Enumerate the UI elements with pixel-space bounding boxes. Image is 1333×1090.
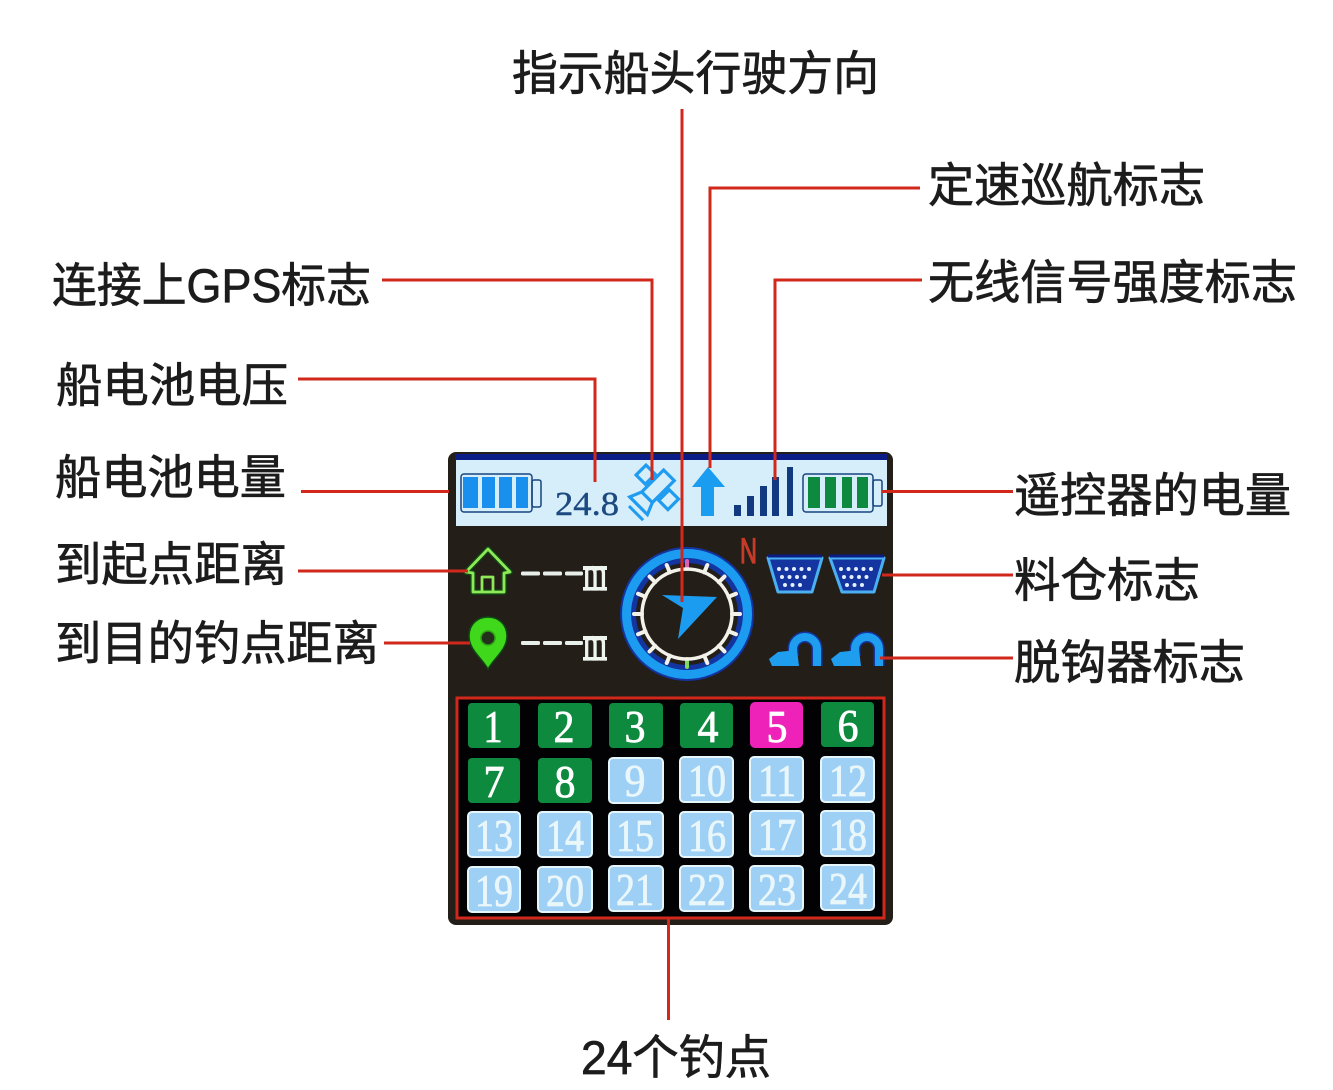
- compass: [626, 554, 748, 674]
- icon: cruise control arrow: [692, 467, 725, 516]
- leader: cruise control: [710, 188, 920, 468]
- spot 2: [538, 701, 592, 752]
- spot 22: 22: [688, 864, 726, 915]
- leader: 24 fishing spots: [667, 918, 670, 1020]
- icon: boat battery: [461, 474, 541, 512]
- leader: hopper: [882, 574, 1013, 576]
- spot 16: 16: [688, 810, 726, 861]
- spot 2: 2: [554, 701, 574, 752]
- label: remote battery level: 遥控器的电量: [1014, 469, 1291, 522]
- spot 13: 13: [475, 810, 513, 861]
- leader: remote battery level: [882, 490, 1013, 493]
- spot 7: [468, 756, 520, 807]
- distance to fishing spot readout: [521, 615, 607, 671]
- icon: release hook 2: [831, 637, 879, 666]
- leader: distance to fishing spot: [384, 642, 470, 644]
- leader: hook release: [880, 656, 1013, 660]
- spot 19: 19: [475, 865, 513, 916]
- label: distance to start: 到起点距离: [55, 538, 287, 591]
- panel: LCD screen: [448, 452, 893, 925]
- spot 1: 1: [484, 701, 502, 752]
- label: hook release: 脱钩器标志: [1014, 636, 1245, 689]
- leader: GPS connected: [382, 280, 652, 480]
- label: boat battery voltage: 船电池电压: [56, 359, 288, 412]
- icon: remote battery: [803, 474, 882, 512]
- spot 15: 15: [616, 810, 654, 861]
- label: GPS connected: 连接上GPS标志: [52, 259, 371, 312]
- icon: bait hopper 1: [768, 556, 822, 592]
- spot 4: 4: [698, 701, 718, 752]
- icon: GPS satellite: [617, 459, 686, 527]
- spot 18: 18: [829, 809, 867, 860]
- distance to start readout: [521, 545, 607, 601]
- icon: fishing spot pin: [469, 617, 507, 669]
- label: bow heading direction: 指示船头行驶方向: [512, 47, 879, 100]
- icon: home: [466, 549, 510, 592]
- distance to start readout: m: [583, 545, 607, 601]
- label: distance to fishing spot: 到目的钓点距离: [55, 617, 379, 670]
- spot 10: 10: [688, 755, 726, 806]
- spot 24: 24: [829, 863, 867, 914]
- spot 1: [468, 701, 520, 752]
- label: boat battery level: 船电池电量: [55, 451, 286, 504]
- spot 3: 3: [624, 701, 646, 752]
- spot 4: [680, 701, 733, 752]
- compass north marker: N: [740, 532, 757, 571]
- spot 6: 6: [838, 700, 858, 751]
- icon: bait hopper 2: [830, 556, 884, 592]
- icon: release hook 1: [769, 637, 817, 666]
- boat battery voltage: 24.8: [555, 486, 619, 523]
- spot 9: [609, 755, 663, 806]
- spot 20: 20: [546, 865, 584, 916]
- spot 12: 12: [829, 755, 867, 806]
- spot 6: [821, 700, 874, 751]
- leader: distance to start: [298, 570, 468, 572]
- spot 5 selected: 5: [766, 701, 788, 752]
- status bar: [456, 460, 887, 526]
- spot 5 selected: [750, 701, 803, 752]
- icon: wireless signal bars: [734, 467, 793, 516]
- spot 14: 14: [546, 810, 584, 861]
- label: wireless signal: 无线信号强度标志: [928, 256, 1297, 309]
- leader: boat battery voltage: [298, 379, 595, 482]
- label: 24 fishing spots: 24个钓点: [581, 1031, 771, 1084]
- spot 23: 23: [758, 864, 796, 915]
- leader: wireless signal: [775, 280, 922, 480]
- spot 8: 8: [554, 756, 576, 807]
- panel: 24 fishing spots: [457, 698, 884, 918]
- spot 9: 9: [624, 755, 646, 806]
- leader: bow heading: [680, 109, 684, 602]
- distance to fishing spot readout: m: [583, 615, 607, 671]
- spot 17: 17: [758, 809, 796, 860]
- label: cruise control: 定速巡航标志: [928, 159, 1205, 212]
- spot 21: 21: [616, 864, 654, 915]
- spot 7: 7: [484, 756, 504, 807]
- compass heading arrow: [662, 595, 717, 639]
- label: hopper: 料仓标志: [1014, 554, 1200, 607]
- spot 8: [538, 756, 592, 807]
- spot 11: 11: [758, 755, 796, 806]
- spot 3: [609, 701, 663, 752]
- leader: boat battery level: [301, 490, 449, 493]
